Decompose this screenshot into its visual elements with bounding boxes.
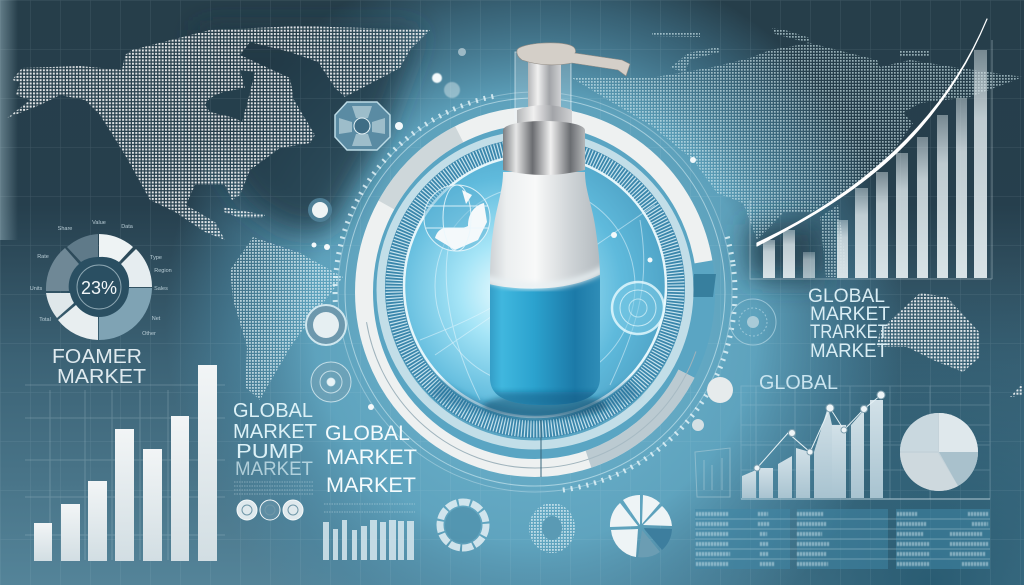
heading: global market trarket market: GLOBAL <box>808 286 885 307</box>
panel: small bar row <box>323 520 414 560</box>
hudson bay <box>205 70 255 122</box>
australia <box>877 293 980 372</box>
heading: global market pump market: MARKET <box>235 459 313 480</box>
heading: global market market: GLOBAL <box>325 422 410 445</box>
icon: bottom gear ring <box>440 502 486 548</box>
heading: global market pump market: GLOBAL <box>233 400 313 422</box>
icon: bottom pie <box>610 495 672 557</box>
trend arrow <box>757 19 987 246</box>
bottle shadow <box>483 394 607 418</box>
icon: left badge one <box>306 305 346 345</box>
heading: global market market: MARKET <box>326 446 417 469</box>
caribbean islands <box>223 207 265 218</box>
heading: global market pump market: MARKET <box>233 421 317 443</box>
donut labels: Rate <box>37 254 49 260</box>
icon: globe <box>424 185 490 251</box>
heading: foamer market: FOAMER <box>52 346 142 368</box>
trend line <box>754 391 885 471</box>
icon: upper left node <box>308 198 332 222</box>
icon: left badge two <box>311 362 351 402</box>
outer fill <box>355 107 715 477</box>
panel: central ring dial <box>309 66 761 518</box>
heading: global market pump market: PUMP <box>236 441 304 463</box>
heading: global market trarket market: MARKET <box>810 341 888 362</box>
panel: small caption lines <box>234 482 415 512</box>
heading: global market pump market <box>233 400 317 480</box>
panel: data table <box>695 509 990 569</box>
south america landmass <box>230 237 343 400</box>
heading: global market trarket market: TRARKET <box>810 322 888 343</box>
icon: sketch product <box>695 448 730 497</box>
tick marks outer <box>309 66 761 518</box>
bottle body <box>490 172 600 405</box>
donut labels: Net <box>152 316 161 322</box>
bottle <box>483 43 630 418</box>
panel: left bar chart <box>25 365 225 561</box>
pump stem <box>528 60 561 110</box>
heading: foamer market <box>52 346 146 388</box>
inner glowing disc <box>404 155 666 417</box>
inner pale ring <box>381 135 689 445</box>
panel: top-right bar chart <box>750 19 992 279</box>
map ocean darkening <box>200 30 825 280</box>
donut labels: Units <box>30 286 43 292</box>
small glowing nodes <box>312 48 696 410</box>
panel: bottom-right charts <box>741 386 990 499</box>
pump head <box>517 43 630 76</box>
donut labels: Share <box>58 226 72 232</box>
area bars <box>742 400 883 498</box>
heading: foamer market: MARKET <box>57 366 146 388</box>
donut labels: Type <box>150 255 162 261</box>
ring grey shade lower-right <box>364 116 706 468</box>
panel: donut chart <box>30 220 172 340</box>
island <box>1010 383 1023 397</box>
donut labels: Data <box>121 224 134 230</box>
icon: three small dials <box>237 500 303 520</box>
donut labels: Sales <box>154 286 168 292</box>
outer white ring <box>364 116 706 468</box>
north america landmass <box>7 26 430 240</box>
blue tick ring <box>394 147 676 429</box>
donut labels: Value <box>92 220 106 226</box>
glass sleeve <box>515 52 571 120</box>
map fragments <box>652 28 930 277</box>
world map <box>7 26 1023 400</box>
metal collar <box>503 121 585 175</box>
bottom segments <box>540 420 542 477</box>
heading: global market market: MARKET <box>326 474 416 497</box>
icon: radar circle <box>612 282 664 334</box>
right gap panel <box>692 274 716 297</box>
thin outer arcs <box>345 98 725 486</box>
bottom shade <box>430 380 640 420</box>
heading: global market market <box>325 422 417 497</box>
donut value: 23% <box>81 278 117 298</box>
donut labels: Region <box>154 268 172 274</box>
icon: white spheres <box>692 377 733 431</box>
heading: global: GLOBAL <box>759 372 838 394</box>
icon: right gear <box>730 299 776 345</box>
heading: global market trarket market <box>808 286 890 362</box>
ring grey shade top-left <box>364 116 706 468</box>
donut labels: Total <box>39 317 51 323</box>
donut labels <box>30 220 172 337</box>
icon: hexagon badge <box>335 102 390 150</box>
pie chart <box>900 413 978 491</box>
heading: global market trarket market: MARKET <box>810 304 890 325</box>
eurasia landmass <box>572 43 1023 240</box>
icon: bottom dotted globe <box>529 503 575 553</box>
upper collar <box>517 105 572 128</box>
donut labels: Other <box>142 331 156 337</box>
